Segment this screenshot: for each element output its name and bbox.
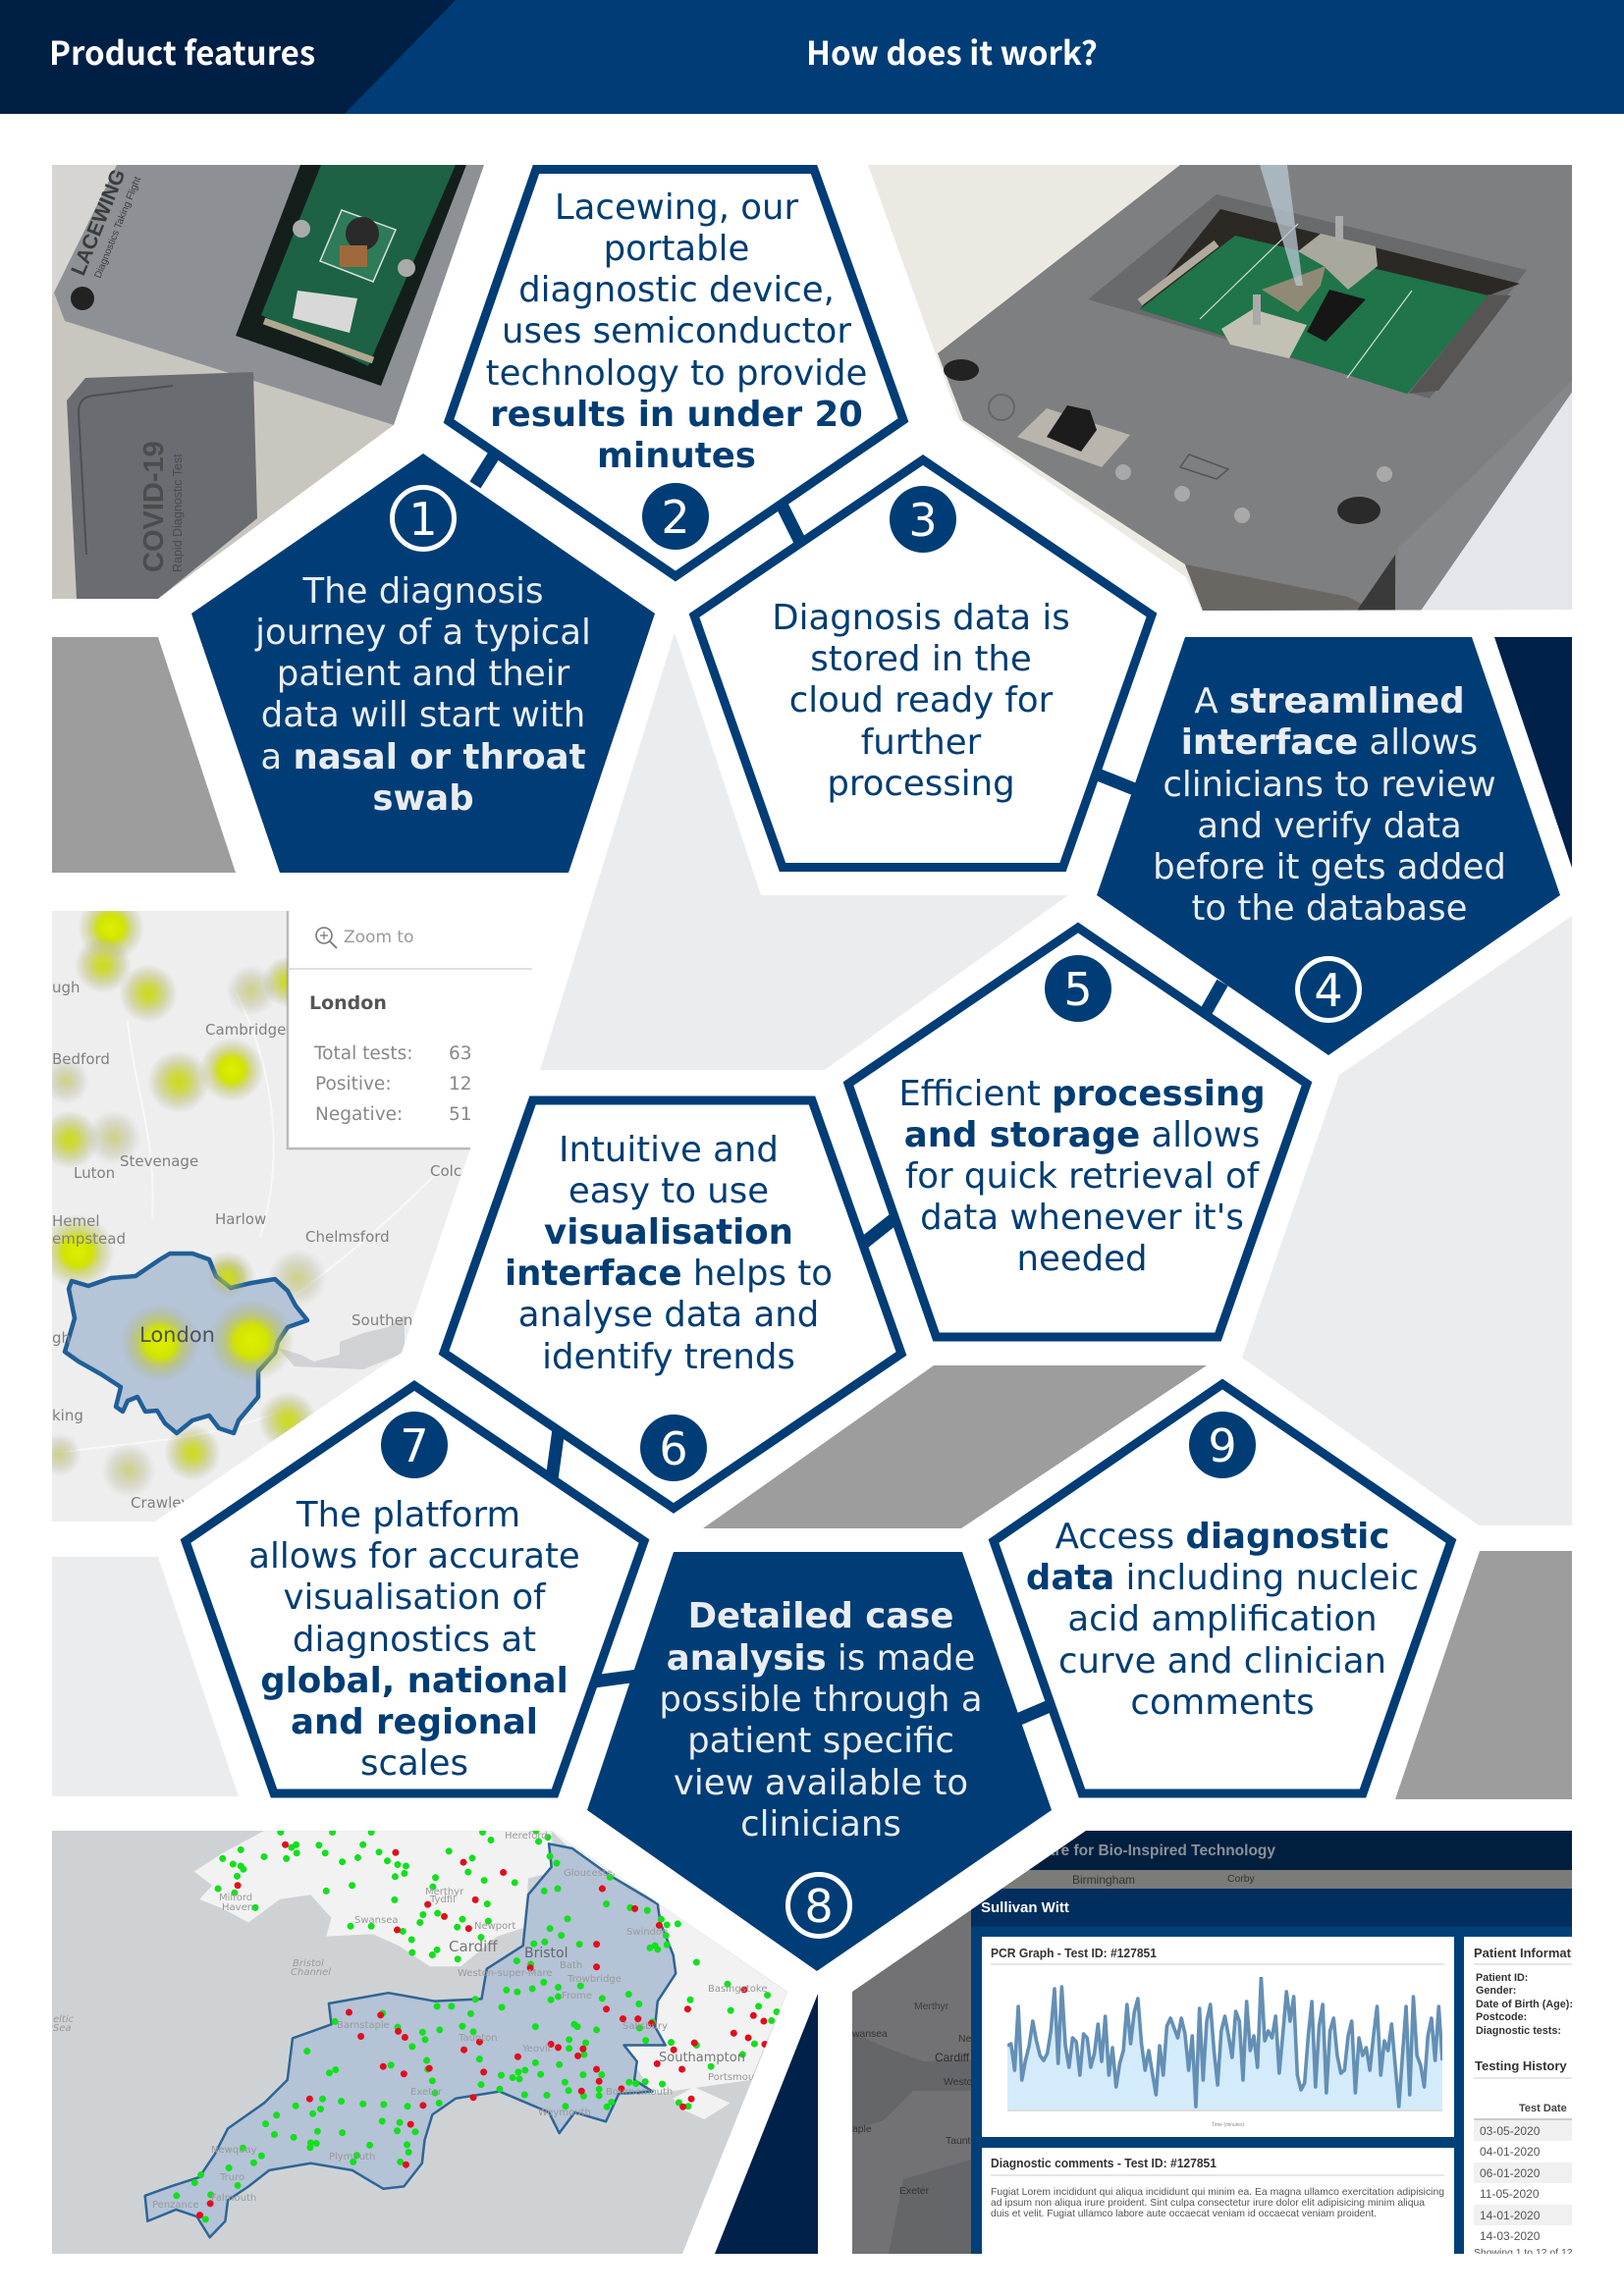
step 6 text: analyse data and [518,1295,819,1335]
card: patient information: Showing 1 to 12 of 12 [1474,2248,1573,2259]
step 7 text: and regional [291,1702,538,1742]
step 4 text: and verify data [1197,806,1462,846]
photo: device with cover: LACEWING [67,166,130,279]
step 4 text: A streamlined [1194,681,1465,721]
step 4 text: before it gets added [1153,847,1506,887]
step 9 text: comments [1130,1682,1315,1723]
connector 8-9 [1017,1703,1056,1720]
photo: device with cover [52,165,484,599]
card: patient information: Gender: [1476,1985,1516,1997]
map place labels: Hereford [505,1831,548,1842]
step 6 text: interface helps to [505,1254,833,1294]
dashboard labels on dark map: Taunton [946,2136,982,2147]
panel: grey block lower right [1395,1551,1572,1799]
step 3 text: stored in the [810,639,1032,679]
step 2 text: minutes [597,436,756,476]
map place labels: Yeovil [521,2044,551,2055]
dashboard screenshot: Centre for Bio-Inspired Technology [1021,1842,1275,1859]
heat spots on region [121,1258,295,1382]
card: patient information: 14-03-2020 [1480,2229,1541,2243]
map labels [52,979,461,1512]
map place labels: Newport [474,1921,515,1932]
card: patient information: 04-01-2020 [1480,2145,1541,2159]
card: patient information: 11-05-2020 [1480,2187,1540,2201]
map place labels: Plymouth [329,2152,375,2163]
step 4 text: clinicians to review [1163,765,1496,805]
map place labels: Barnstaple [337,2020,390,2031]
step 5 text: Efficient processing [898,1074,1266,1114]
map place labels: Swindon [626,1927,668,1938]
map place labels: Merthyr [425,1887,464,1897]
London region [65,1254,307,1433]
map place labels: Milford [219,1893,252,1903]
card: diagnostic comments: Diagnostic comments - Test ID: #127851 [991,2156,1217,2170]
step 3 badge [890,486,956,553]
header bar [0,0,1624,114]
panel: light grey lower left [52,1557,239,1796]
step 6 text: visualisation [544,1212,793,1253]
step 8 text: Detailed case [688,1596,953,1636]
popup: London stats: 63 [449,1043,472,1064]
map place labels: Weston-super-Mare [458,1968,553,1979]
map place labels: Channel [291,1967,331,1978]
step 9 text: acid amplification [1067,1599,1378,1639]
step 2 text: technology to provide [486,353,867,394]
map place labels: Cardiff [449,1938,498,1955]
popup: London stats [288,911,532,1148]
map place labels: Bristol [293,1958,324,1969]
map place labels: Penzance [152,2200,199,2211]
map place labels: Swansea [354,1915,398,1926]
red test dots [200,1844,765,2216]
map place labels: Gloucester [564,1868,618,1879]
step 9 text: Access diagnostic [1056,1517,1389,1557]
map place labels: Bristol [524,1946,568,1961]
dashboard labels on dark map: Exeter [899,2186,930,2197]
step 2 badge: 2 [661,491,690,544]
map labels: Harlow [215,1210,266,1228]
map place labels: Exeter [410,2087,443,2098]
step 1 text: a nasal or throat [260,737,586,777]
popup: London stats: 51 [449,1104,472,1125]
map place labels [53,1831,768,2211]
step 3 text: cloud ready for [789,680,1054,721]
map place labels: Southampton [659,2051,745,2065]
step 3 text: processing [827,764,1015,804]
map place labels: Truro [219,2172,244,2183]
step 2 text: diagnostic device, [518,270,835,310]
map: South West test results [52,1831,788,2254]
panel: grey parallelogram [703,1365,1207,1528]
step 8 text: analysis is made [667,1638,975,1679]
card: patient information: Testing History [1475,2058,1567,2073]
step 5 text: data whenever it's [920,1198,1244,1238]
dashboard labels on dark map: New [958,2034,979,2045]
step 6 panel [444,1100,901,1508]
panel: navy triangle right [1494,637,1572,868]
card: PCR graph: Time (minutes) [1212,2122,1244,2128]
step 3 text: further [861,722,982,763]
panel: navy triangle bottom [715,1994,818,2254]
panel: light grey centre [540,632,1068,1070]
step 7 text: diagnostics at [293,1620,536,1660]
step 1 panel [191,454,655,873]
connector 7-8 [594,1676,638,1682]
step 8 badge: 8 [804,1880,834,1933]
step 7 badge [381,1412,448,1478]
popup: London stats: Negative: [315,1104,403,1125]
dashboard screenshot: Corby [1227,1874,1256,1885]
step 5 text: for quick retrieval of [905,1156,1261,1197]
step 5 badge: 5 [1063,963,1093,1016]
step 2 text: results in under 20 [490,395,863,435]
step 8 badge [787,1875,850,1936]
step 6 badge: 6 [659,1422,688,1475]
step 7 text: global, national [260,1661,568,1701]
step 8 text: patient specific [687,1721,954,1761]
card: diagnostic comments: duis et velit. Fugiat ullamco labore aute occaecat veniam id occaecat veniam proident. [991,2209,1377,2219]
map place labels: Bath [560,1960,582,1971]
dashboard labels on dark map [852,2002,971,2194]
step 1 badge: 1 [408,493,438,546]
card: patient information: 06-01-2020 [1480,2166,1541,2180]
card: patient information: Date of Birth (Age): [1476,1999,1573,2010]
PCR line chart [1007,1977,1442,2109]
connector 6-7 [552,1429,559,1479]
dashboard screenshot: Birmingham [1072,1873,1135,1887]
card: patient information: 03-05-2020 [1480,2124,1541,2138]
map labels: Stevenage [120,1152,198,1170]
map place labels: eltic [53,2014,75,2025]
step 9 panel [994,1384,1451,1793]
map place labels: Salisbury [623,2021,668,2032]
photo: device with cover: COVID-19 [138,441,170,572]
dashboard screenshot: Sullivan Witt [981,1899,1069,1916]
step 5 text: and storage allows [904,1115,1260,1155]
step 7 text: The platform [296,1495,520,1535]
step 4 panel [1097,637,1560,1055]
panel: light grey right [1242,916,1572,1525]
step 8 text: view available to [674,1763,968,1803]
step 2 badge [642,483,709,550]
map place labels: Falmouth [211,2193,256,2204]
map labels: Chelmsford [305,1228,390,1246]
map place labels: Bournemouth [606,2087,673,2098]
step 1 text: swab [372,778,474,819]
card: diagnostic comments [982,2148,1454,2254]
step 2 panel [449,169,903,576]
map labels: London [139,1323,215,1347]
step 7 badge: 7 [400,1419,429,1472]
dashboard blue body [971,1927,1572,2254]
step 6 text: identify trends [542,1337,795,1377]
step 2 text: portable [604,229,749,269]
step 4 text: interface allows [1181,722,1478,763]
step 3 panel [694,459,1152,868]
dashboard labels on dark map: wansea [851,2029,888,2040]
heading: product features: Product features [49,27,315,75]
card: patient information: Test Date [1519,2103,1567,2114]
dashboard labels on dark map: aple [852,2124,872,2135]
step 4 badge: 4 [1314,964,1343,1017]
map place labels: Taunton [458,2033,498,2044]
step 9 badge [1189,1412,1256,1478]
map labels: Bedford [52,1050,110,1068]
map labels: empstead [52,1230,126,1248]
step 7 text: scales [360,1743,468,1784]
map place labels: Trowbridge [567,1974,622,1985]
header dark tab [0,0,456,114]
connector 5-6 [864,1216,897,1243]
popup: London stats: Positive: [315,1074,392,1095]
step 5 panel [848,928,1307,1337]
heat spots under region [38,894,327,1498]
card: patient information: Patient ID: [1476,1972,1528,1984]
photo: device with cover: Rapid Diagnostic Test [171,454,185,572]
popup: London stats: London [309,992,387,1014]
popup: London stats: Total tests: [313,1043,412,1064]
step 8 text: possible through a [659,1680,983,1720]
photo: device with pipette [868,165,1575,611]
map labels: king [52,1407,83,1424]
dashboard labels on dark map: Cardiff [935,2051,970,2064]
step 3 badge: 3 [908,494,938,547]
panel: grey block left [52,637,236,873]
map: London heat map [38,894,532,1522]
step 8 panel [587,1552,1052,1971]
connector 2-3 [781,503,801,544]
step 9 text: data including nucleic [1026,1558,1419,1598]
step 1 text: patient and their [277,654,570,694]
step 2 text: uses semiconductor [502,311,851,351]
dashboard labels on dark map: Merthyr [914,2002,949,2012]
map place labels: Newquay [211,2145,257,2156]
south west region [145,1843,676,2237]
map labels: Crawley [131,1494,189,1512]
step 1 text: The diagnosis [301,571,544,612]
map place labels: Tydfil [429,1895,456,1905]
map place labels: Haven [222,1902,253,1913]
step 5 badge [1045,955,1111,1022]
step 9 badge: 9 [1208,1419,1237,1472]
map place labels: Sea [53,2023,72,2034]
card: patient information: 14-01-2020 [1480,2209,1541,2222]
step 4 badge [1298,958,1359,1021]
step 6 text: easy to use [568,1171,769,1211]
card: patient information [1464,1937,1572,2254]
step 1 text: data will start with [261,695,585,735]
map place labels: Weymouth [538,2108,591,2118]
card: patient information: Patient Information [1474,1946,1591,1960]
card: PCR graph: PCR Graph - Test ID: #127851 [991,1946,1157,1960]
step 9 text: curve and clinician [1058,1641,1386,1682]
card: patient information: Postcode: [1476,2011,1527,2023]
green test dots [177,1831,777,2219]
step 1 badge [393,487,454,550]
top title bar [1029,1831,1572,1870]
step 1 text: journey of a typical [254,613,591,653]
dashboard labels on dark map: Weston-s [944,2077,987,2088]
step 4 text: to the database [1191,888,1468,929]
map labels: Southen [352,1311,412,1329]
dashboard screenshot [851,1831,1591,2259]
map labels: gh [52,1329,71,1347]
step 7 text: visualisation of [283,1577,547,1618]
map place labels: Basingstoke [708,1984,768,1995]
card: PCR graph [982,1937,1454,2137]
step 6 badge [640,1415,707,1481]
popup: London stats: 12 [449,1074,472,1095]
step 7 panel [186,1386,644,1793]
card: diagnostic comments: ad ipsum non aliqua irure proident. Sint culpa consectetur irure dolor elit adipisicing minim aliqua [991,2198,1425,2209]
map place labels: Portsmouth [708,2072,764,2083]
connector 3-4 [1098,774,1137,790]
step 5 text: needed [1016,1239,1148,1279]
step 2 text: Lacewing, our [555,187,799,228]
step 7 text: allows for accurate [248,1536,580,1576]
map place labels: Frome [562,1991,592,2002]
popup: London stats: Zoom to [344,928,413,947]
step 8 text: clinicians [740,1804,901,1844]
map labels: Hemel [52,1212,100,1230]
patient name bar [971,1889,1572,1927]
connector 1-2 [475,451,497,485]
map labels: ugh [52,979,81,996]
card: diagnostic comments: Fugiat Lorem incididunt qui aliqua incididunt qui minim ea. Ea magna ullamco exercitation adipisicing [991,2187,1444,2198]
map labels: Colc [430,1162,461,1180]
heading: how does it work: How does it work? [806,27,1098,75]
step 3 text: Diagnosis data is [772,598,1070,638]
map labels: Luton [74,1164,115,1182]
connector 4-5 [1206,983,1222,1012]
land [194,1831,787,2119]
photo: device with cover: Diagnostics Taking Flight [93,175,143,280]
map labels: Cambridge [205,1021,286,1039]
card: patient information: Diagnostic tests: [1476,2025,1561,2037]
step 6 text: Intuitive and [559,1130,779,1170]
